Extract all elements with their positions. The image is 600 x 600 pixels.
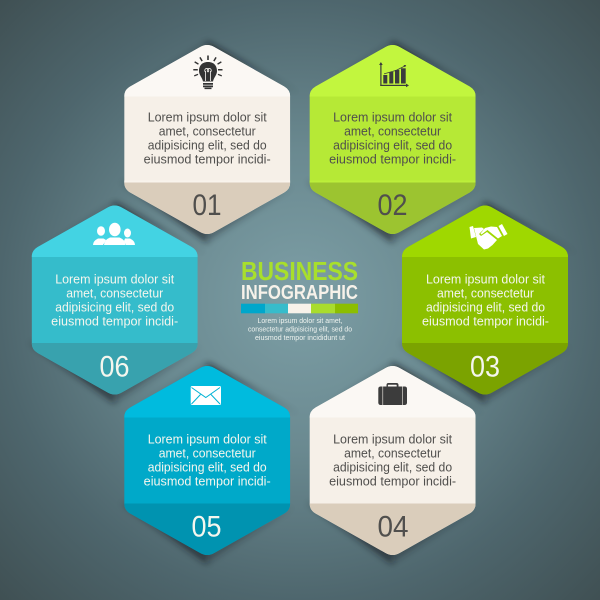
title: BUSINESS bbox=[241, 256, 358, 286]
panel: hexagon 05 bbox=[117, 360, 299, 564]
text block: adipisicing elit, sed do bbox=[148, 138, 267, 152]
number: 03 bbox=[470, 350, 500, 384]
text block: adipisicing elit, sed do bbox=[333, 138, 452, 152]
panel: hexagon 03 bbox=[395, 200, 577, 404]
icon: suitcase bbox=[378, 383, 407, 405]
text block: adipisicing elit, sed do bbox=[426, 300, 545, 314]
subtitle text: consectetur adipisicing elit, sed do bbox=[248, 326, 352, 334]
icon: envelope bbox=[191, 386, 221, 405]
text block: Lorem ipsum dolor sit bbox=[333, 110, 453, 124]
text block: amet, consectetur bbox=[159, 446, 256, 460]
text block bbox=[329, 432, 456, 488]
text block bbox=[144, 110, 271, 166]
number: 04 bbox=[378, 510, 408, 544]
number: 01 bbox=[192, 189, 222, 222]
panel: hexagon 02 bbox=[303, 40, 485, 244]
subtitle text: Lorem ipsum dolor sit amet, bbox=[258, 318, 343, 325]
text block bbox=[144, 432, 271, 488]
text block bbox=[422, 272, 549, 328]
text block: adipisicing elit, sed do bbox=[333, 460, 452, 474]
number: 05 bbox=[192, 510, 222, 544]
panel: hexagon 04 bbox=[303, 360, 485, 564]
text block: eiusmod tempor incidi- bbox=[329, 474, 456, 488]
text block: eiusmod tempor incidi- bbox=[422, 314, 549, 328]
number: 02 bbox=[378, 189, 408, 222]
icon: light bulb bbox=[193, 56, 222, 89]
text block: amet, consectetur bbox=[159, 124, 256, 138]
text block: amet, consectetur bbox=[344, 446, 441, 460]
number: 06 bbox=[100, 350, 130, 384]
subtitle text: eiusmod tempor incididunt ut bbox=[255, 335, 345, 342]
text block bbox=[329, 110, 456, 166]
text block: eiusmod tempor incidi- bbox=[144, 474, 271, 488]
text block: amet, consectetur bbox=[437, 286, 534, 300]
text block: amet, consectetur bbox=[344, 124, 441, 138]
text block bbox=[51, 272, 178, 328]
text block: Lorem ipsum dolor sit bbox=[333, 432, 453, 446]
icon: bar chart bbox=[379, 62, 409, 87]
colour strip bbox=[241, 304, 358, 313]
text block: eiusmod tempor incidi- bbox=[144, 152, 271, 166]
panel: hexagon 06 bbox=[25, 200, 207, 404]
text block: Lorem ipsum dolor sit bbox=[148, 110, 267, 124]
text block: eiusmod tempor incidi- bbox=[329, 152, 456, 166]
subtitle text bbox=[248, 318, 352, 342]
title bbox=[241, 256, 358, 304]
panel: hexagon 01 bbox=[117, 40, 299, 244]
text block: adipisicing elit, sed do bbox=[148, 460, 267, 474]
text block: Lorem ipsum dolor sit bbox=[55, 272, 175, 286]
text block: adipisicing elit, sed do bbox=[55, 300, 174, 314]
icon: people bbox=[93, 223, 135, 245]
text block: amet, consectetur bbox=[66, 286, 163, 300]
text block: Lorem ipsum dolor sit bbox=[426, 272, 545, 286]
title: INFOGRAPHIC bbox=[241, 282, 358, 304]
text block: Lorem ipsum dolor sit bbox=[148, 432, 267, 446]
icon: handshake bbox=[470, 224, 508, 250]
text block: eiusmod tempor incidi- bbox=[51, 314, 178, 328]
